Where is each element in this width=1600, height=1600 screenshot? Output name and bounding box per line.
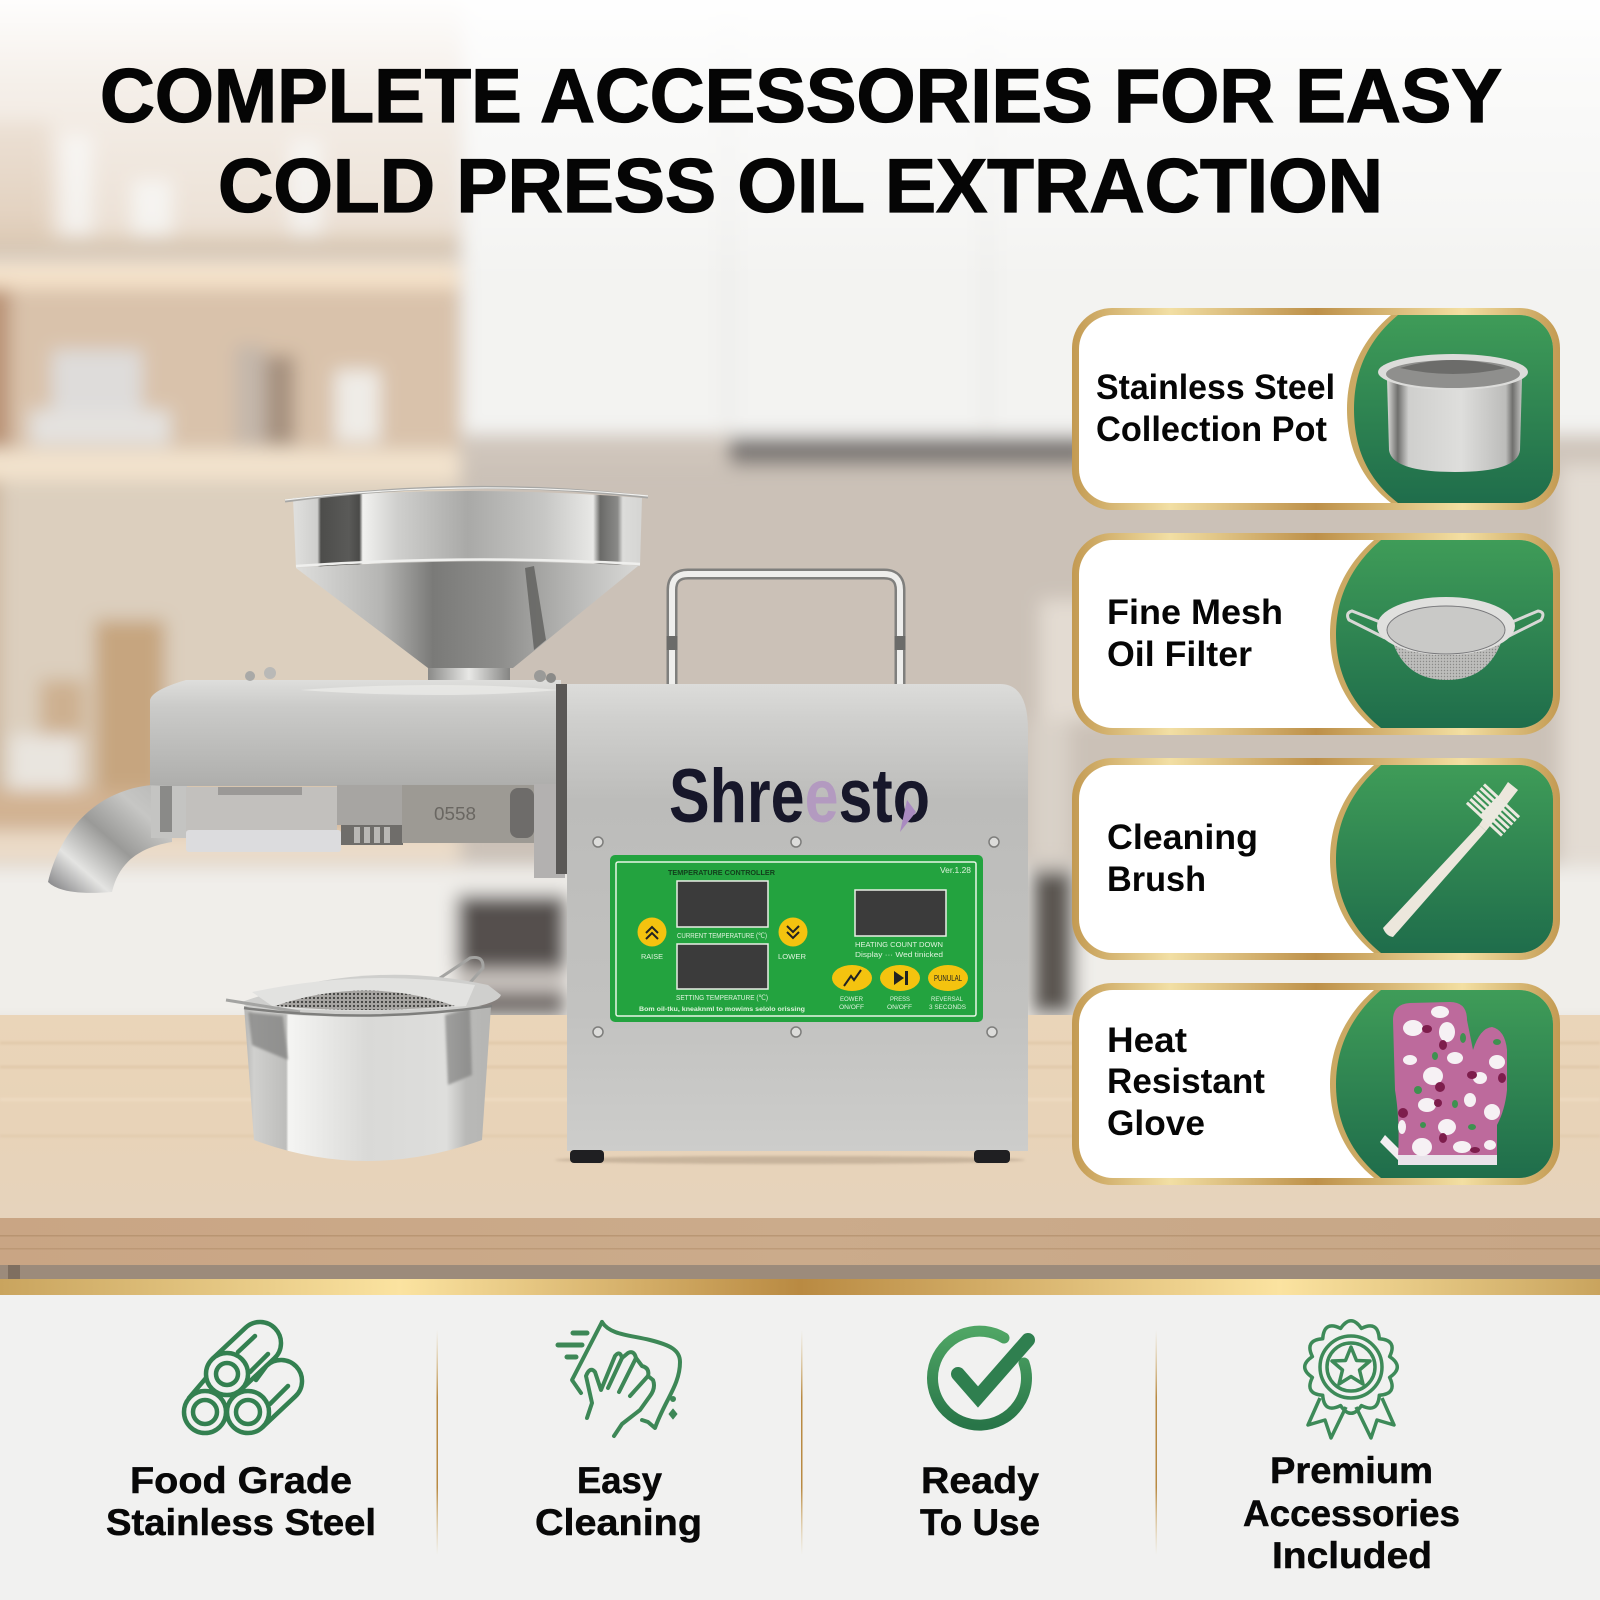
panel labels: ON/OFF [887,1004,912,1011]
text: cleaning brush [1107,818,1258,899]
text: premium accessories included: Premium [1270,1450,1433,1491]
oil press machine [48,487,1028,1164]
text: heat resistant glove: Resistant [1107,1062,1265,1101]
icon: hand wiping with cloth [558,1322,680,1436]
hopper funnel [285,487,648,683]
panel: heat resistant glove [1072,983,1560,1185]
icon: mesh strainer [1348,597,1543,680]
text: food grade stainless steel: Stainless Steel [106,1502,376,1543]
panel labels: TEMPERATURE CONTROLLER [668,868,776,877]
text: cleaning brush: Brush [1107,860,1206,899]
title: COLD PRESS OIL EXTRACTION [218,144,1383,229]
panel labels: SETTING TEMPERATURE (℃) [676,993,768,1002]
panel labels: 3 SECONDS [929,1004,967,1011]
shadow under machine [555,1156,1025,1164]
text: easy cleaning [535,1460,702,1543]
icon: oven glove [1380,1002,1507,1165]
title [100,54,1502,229]
icon: steel pot [1378,354,1528,472]
panel: stainless steel collection pot [1072,308,1560,510]
text: ready to use [920,1460,1040,1543]
text: fine mesh oil filter: Fine Mesh [1107,593,1283,632]
text: premium accessories included [1243,1450,1460,1576]
panel screws [593,837,999,1037]
panel labels: CURRENT TEMPERATURE (℃) [677,931,767,940]
panel labels: REVERSAL [931,996,963,1003]
text: heat resistant glove [1107,1021,1265,1143]
icon: check mark [932,1331,1028,1425]
panel buttons [638,918,968,991]
text: heat resistant glove: Glove [1107,1104,1205,1143]
panel labels [639,866,972,1013]
text: food grade stainless steel: Food Grade [130,1460,352,1501]
hinge strip [556,684,567,874]
panel labels: ON/OFF [839,1004,864,1011]
text: ready to use: To Use [920,1502,1040,1543]
icon: stainless steel logs [184,1322,302,1433]
text: cleaning brush: Cleaning [1107,818,1258,857]
panel labels: PUNULAL [934,974,962,983]
text: premium accessories included: Included [1272,1535,1432,1576]
text: stainless steel collection pot [1096,368,1335,449]
icon: brush [1383,782,1520,937]
panel labels: PRESS [890,996,911,1003]
text: easy cleaning: Cleaning [535,1502,702,1543]
text: heat resistant glove: Heat [1107,1021,1187,1060]
brand logo: Shreesto [669,754,930,839]
table edge [0,1218,1600,1265]
panel labels: LOWER [778,952,807,961]
text: premium accessories included: Accessories [1243,1493,1460,1534]
casting number: 0558 [434,804,476,824]
bottom feature strip [0,1279,1600,1600]
panel labels: HEATING COUNT DOWN [855,940,943,949]
panel: cleaning brush [1072,758,1560,960]
panel labels: Ver.1.28 [940,866,972,875]
text: food grade stainless steel [106,1460,376,1543]
panel labels: Display ··· Wed tinicked [855,950,943,959]
spout pipe [48,785,172,893]
table top [0,1015,1600,1219]
barrel cover [150,667,561,786]
text: easy cleaning: Easy [577,1460,662,1501]
displays [677,881,946,989]
text: fine mesh oil filter: Oil Filter [1107,635,1252,674]
icon: carry handle [672,574,900,684]
button glyphs [646,926,861,986]
press mechanism [151,784,565,878]
text: stainless steel collection pot: Stainless Steel [1096,368,1335,407]
title: COMPLETE ACCESSORIES FOR EASY [100,54,1502,139]
main body [567,684,1028,1151]
panel labels: Bom oil-tku, kneaknml to mowims selolo orissing [639,1006,805,1013]
text: ready to use: Ready [921,1460,1039,1501]
text: stainless steel collection pot: Collection Pot [1096,410,1327,449]
text: fine mesh oil filter [1107,593,1283,674]
panel labels: EOWER [840,996,863,1003]
control panel [610,855,983,1022]
panel: fine mesh oil filter [1072,533,1560,735]
collection pot with strainer [226,957,501,1161]
icon: award badge [1305,1321,1397,1438]
feet [570,1150,1010,1163]
panel labels: RAISE [641,952,663,961]
